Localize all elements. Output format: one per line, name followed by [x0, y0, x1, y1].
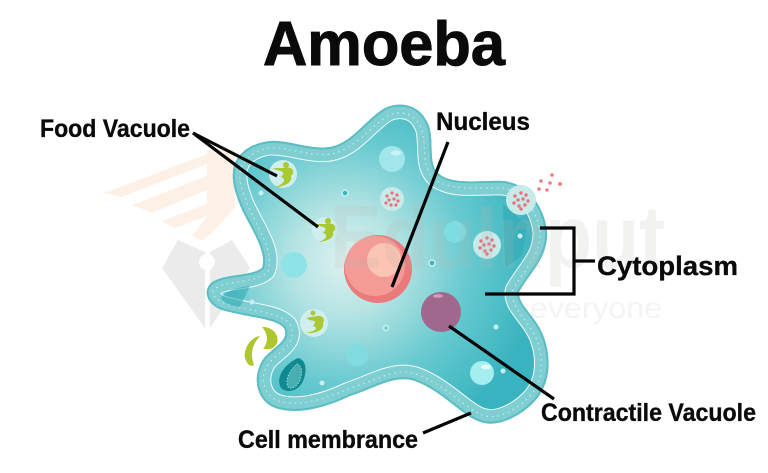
cell body	[207, 105, 549, 424]
food particle crescents	[245, 327, 278, 366]
label: nucleus: Nucleus	[436, 108, 530, 136]
food vacuole bottom	[300, 309, 328, 337]
label: contractile vacuole: Contractile Vacuole	[541, 399, 756, 427]
contractile vacuole	[421, 292, 461, 332]
membrane dots	[213, 113, 541, 417]
cell membrane	[207, 105, 549, 424]
watermark: orange stripes	[104, 150, 235, 241]
leader line: contractile vacuole	[449, 326, 554, 399]
watermark: grey pen nib	[162, 240, 250, 328]
food vacuole middle	[312, 217, 338, 243]
dark cytoplasm shading	[221, 204, 527, 307]
nucleus	[344, 235, 412, 303]
leader line: nucleus	[392, 142, 448, 287]
food vacuole top	[269, 160, 297, 188]
pink vacuole right	[473, 231, 501, 259]
leader lines: food vacuole	[193, 133, 318, 227]
amoeba cell	[207, 105, 549, 424]
small particles	[250, 190, 522, 386]
expelled red particles	[537, 173, 562, 192]
title: Amoeba	[263, 10, 506, 79]
bracket: cytoplasm	[485, 228, 595, 294]
watermark: tagline: everyone	[530, 292, 662, 325]
label: food vacuole: Food Vacuole	[40, 115, 190, 143]
mitochondrion	[279, 358, 306, 391]
bubbles	[281, 146, 494, 385]
leader line: cell membrane	[423, 413, 471, 433]
pink vacuole upper	[380, 187, 404, 211]
watermark: site name: EduInput	[330, 188, 665, 288]
pink vacuole edge	[506, 185, 536, 215]
label: cell membrance: Cell membrance	[238, 426, 418, 454]
label: cytoplasm: Cytoplasm	[597, 251, 738, 281]
